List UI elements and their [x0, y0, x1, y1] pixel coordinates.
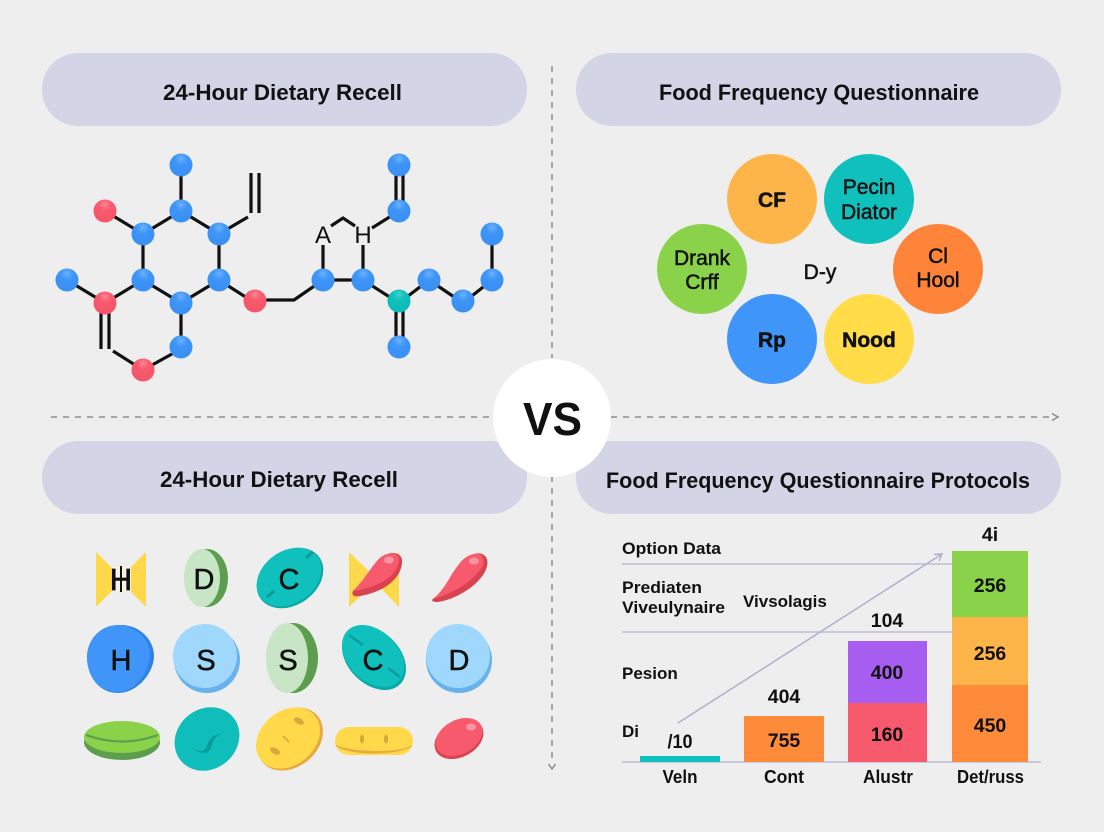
bar values: 404 — [768, 686, 800, 708]
axis labels: Pesion — [622, 664, 678, 683]
bar values: 256 — [974, 643, 1006, 665]
circle: Drank Crff: Crff — [685, 271, 719, 294]
atoms — [56, 154, 504, 382]
VS badge: VS — [523, 393, 582, 445]
row 2: D — [449, 645, 469, 677]
row 1: C — [279, 564, 299, 596]
row 1: D — [194, 564, 214, 596]
bar values: 104 — [871, 610, 903, 632]
bar: Cont — [744, 716, 824, 762]
circle: CF — [727, 154, 817, 244]
circle: Rp — [727, 294, 817, 384]
heading: top left — [42, 53, 527, 126]
category labels: Det/russ — [957, 767, 1024, 787]
axis labels: Vivsolagis — [743, 592, 827, 611]
atom labels: A — [315, 222, 331, 249]
circle: Rp: Rp — [758, 329, 786, 352]
circle: Nood — [824, 294, 914, 384]
bar values: /10 — [668, 731, 693, 753]
row 1: H — [110, 562, 132, 597]
circle: Pecin Diator — [824, 154, 914, 244]
category labels: Veln — [662, 767, 698, 787]
row 2 — [87, 613, 492, 703]
chart lines — [622, 564, 1041, 762]
circle: Pecin Diator: Diator — [841, 201, 897, 224]
bar: Detruss middle — [952, 617, 1028, 685]
axis labels: Option Data — [622, 539, 722, 558]
axis labels: Viveulynaire — [622, 598, 725, 617]
heading: bottom left — [42, 441, 527, 514]
center label: D-y — [804, 261, 837, 284]
atom labels: H — [354, 222, 372, 249]
bar values: 400 — [871, 662, 903, 684]
row 1 — [96, 535, 487, 621]
heading: top right: Food Frequency Questionnaire — [659, 80, 979, 105]
circle: Pecin Diator: Pecin — [843, 176, 895, 199]
row 2: S — [196, 645, 216, 677]
circle: Drank Crff — [657, 224, 747, 314]
axis labels — [622, 539, 827, 741]
heading: top right — [576, 53, 1061, 126]
divider: vertical dashed arrow — [548, 66, 556, 769]
row 2: C — [363, 645, 383, 677]
atom labels — [315, 222, 372, 249]
category labels: Alustr — [863, 767, 913, 787]
molecule diagram — [56, 154, 504, 382]
axis labels: Prediaten — [622, 578, 702, 597]
bar values: 450 — [974, 715, 1006, 737]
heading: top left: 24-Hour Dietary Recell — [163, 80, 402, 105]
heading: bottom right: Food Frequency Questionnaire Protocols — [606, 468, 1030, 493]
category labels: Cont — [764, 767, 804, 787]
trend arrow — [678, 554, 942, 723]
food group circles — [657, 154, 983, 384]
bar values: 4i — [982, 524, 998, 546]
bar: Alustr lower — [848, 703, 927, 762]
circle: CF: CF — [758, 189, 786, 212]
bar values — [668, 524, 1006, 753]
bar: Detruss upper — [952, 551, 1028, 617]
row 3 — [84, 694, 490, 784]
circle: Nood: Nood — [842, 329, 896, 352]
bar chart — [622, 524, 1041, 787]
circle: Drank Crff: Drank — [674, 247, 731, 270]
heading: bottom left: 24-Hour Dietary Recell — [160, 467, 398, 492]
row 2: H — [111, 645, 131, 677]
VS badge — [493, 359, 611, 477]
category labels — [662, 767, 1024, 787]
circle: Cl Hool — [893, 224, 983, 314]
pill grid — [84, 535, 492, 784]
bar: Veln — [640, 756, 720, 762]
bar values: 160 — [871, 724, 903, 746]
bar values: 755 — [768, 730, 800, 752]
circle: Cl Hool: Cl — [928, 245, 948, 268]
heading: bottom right — [576, 441, 1061, 514]
row 2: S — [278, 645, 298, 677]
bar: Detruss lower — [952, 685, 1028, 762]
circle: Cl Hool: Hool — [916, 269, 960, 292]
divider: horizontal dashed arrow — [51, 414, 1058, 420]
bar values: 256 — [974, 575, 1006, 597]
axis labels: Di — [622, 722, 639, 741]
bar: Alustr upper — [848, 641, 927, 703]
